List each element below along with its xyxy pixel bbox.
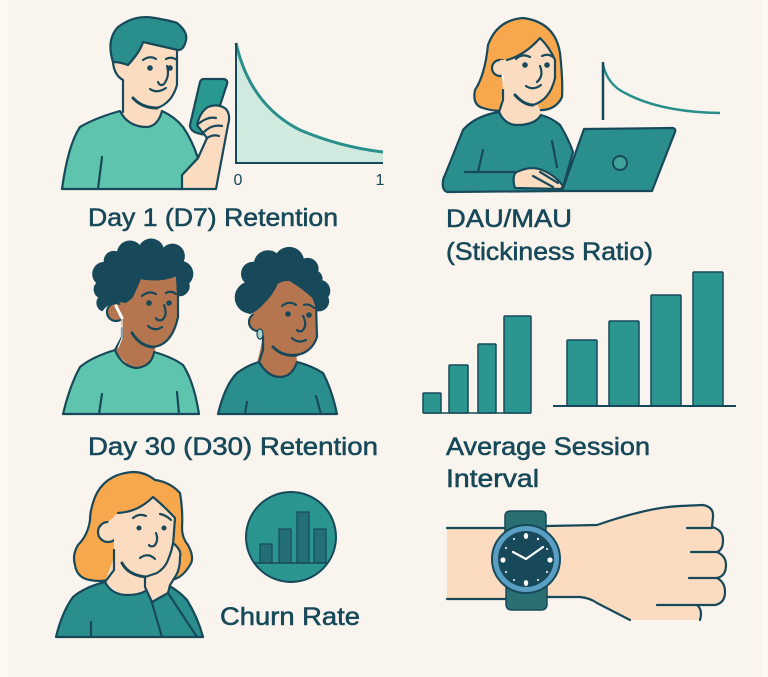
heading: DAU/MAU [446, 205, 572, 233]
illustration: person with earbud [63, 240, 199, 414]
icon: circle with bars [246, 492, 336, 582]
heading [446, 433, 650, 493]
chart: small decay curve [603, 62, 720, 120]
heading: Day 1 (D7) Retention [88, 204, 338, 232]
heading [446, 205, 653, 266]
heading: Churn Rate [220, 603, 360, 631]
chart: decay curve: 1 [376, 172, 385, 189]
illustration: man with phone [62, 17, 229, 189]
heading: Average Session [446, 433, 650, 461]
heading: Interval [446, 465, 539, 493]
illustration: person with earring [218, 248, 337, 414]
illustration: sad woman [56, 472, 203, 637]
chart: decay curve: 0 [234, 172, 243, 189]
panel: average session interval [423, 272, 736, 620]
panel: day 1 retention [62, 17, 385, 232]
bar chart: large [553, 272, 736, 406]
chart: decay curve [234, 43, 385, 189]
heading: (Stickiness Ratio) [446, 238, 653, 266]
bar chart: small [423, 316, 531, 413]
illustration: woman with laptop [443, 18, 675, 192]
panel: churn rate [56, 472, 360, 637]
panel: day 30 retention [63, 240, 378, 461]
illustration: wrist with watch [447, 505, 726, 620]
heading: Day 30 (D30) Retention [88, 433, 378, 461]
panel: dau/mau [443, 18, 720, 266]
